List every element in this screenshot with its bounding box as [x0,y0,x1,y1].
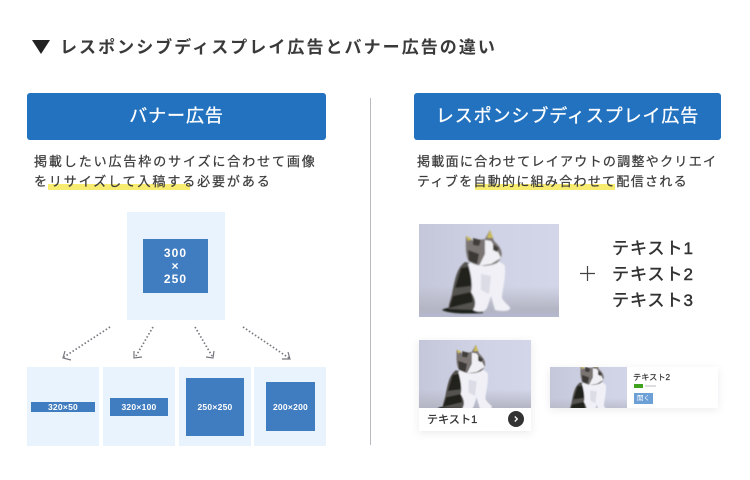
banner: 200x200: 200×200 [273,402,308,412]
card text: テキスト2 [633,373,670,382]
card image [550,367,627,408]
text block: banner description: 掲載したい広告枠のサイズに合わせて画像 [34,154,317,169]
icon: down triangle [32,40,50,54]
text block: responsive description [417,154,717,189]
ad card: horizontal layout [550,367,718,408]
source banner panel [127,212,225,320]
card image [419,340,531,408]
banner: 300x250: × [171,258,180,272]
banner: 300x250: 300 [164,246,187,260]
button [634,393,653,404]
banner: 320x100: 320×100 [121,402,157,412]
size panel: 250x250 [179,367,251,446]
banner: 300x250 [143,239,208,293]
text block: banner description: をリサイズして入稿する必要がある [34,174,272,189]
arrow 1 [63,327,110,360]
size panel: 320x50 [27,367,99,446]
size panel: 320x100 [103,367,175,446]
text block: responsive description: 掲載面に合わせてレイアウトの調整やクリエイ [417,154,717,169]
panel: responsive display ads heading [414,93,721,140]
panel: responsive display ads heading: レスポンシブディスプレイ広告 [436,106,699,126]
text block: responsive description: ティブを自動的に組み合わせて配信される [417,174,688,189]
button: 開く [637,395,650,402]
banner: 200x200 [266,382,315,431]
green label [634,384,643,388]
ad card: vertical layout [419,340,531,431]
text assets list [612,239,694,310]
icon: plus [580,266,595,281]
banner: 250x250: 250×250 [197,402,233,412]
banner: 320x50 [31,402,95,412]
highlight: responsive text [475,184,615,190]
banner: 320x50: 320×50 [48,402,78,412]
icon: arrow button [508,411,524,427]
banner: 300x250: 250 [164,272,187,286]
highlight: banner text [48,184,190,190]
title text: レスポンシブディスプレイ広告とバナー広告の違い [60,38,497,57]
text block: banner description [34,154,317,189]
text assets list: テキスト2 [612,265,694,284]
panel: banner ads heading [27,93,326,140]
panel: banner ads heading: バナー広告 [129,106,224,126]
arrow 2 [134,327,153,358]
image: cat photo asset [419,224,559,317]
text assets list: テキスト1 [612,239,694,258]
arrow 4 [243,327,290,359]
card text: テキスト1 [427,414,477,426]
banner: 250x250 [186,378,244,436]
arrow 3 [195,327,214,358]
arrows: resizing to four sizes [62,326,291,361]
title [32,38,497,57]
banner: 320x100 [110,398,168,416]
size panel: 200x200 [254,367,326,446]
text assets list: テキスト3 [612,291,694,310]
